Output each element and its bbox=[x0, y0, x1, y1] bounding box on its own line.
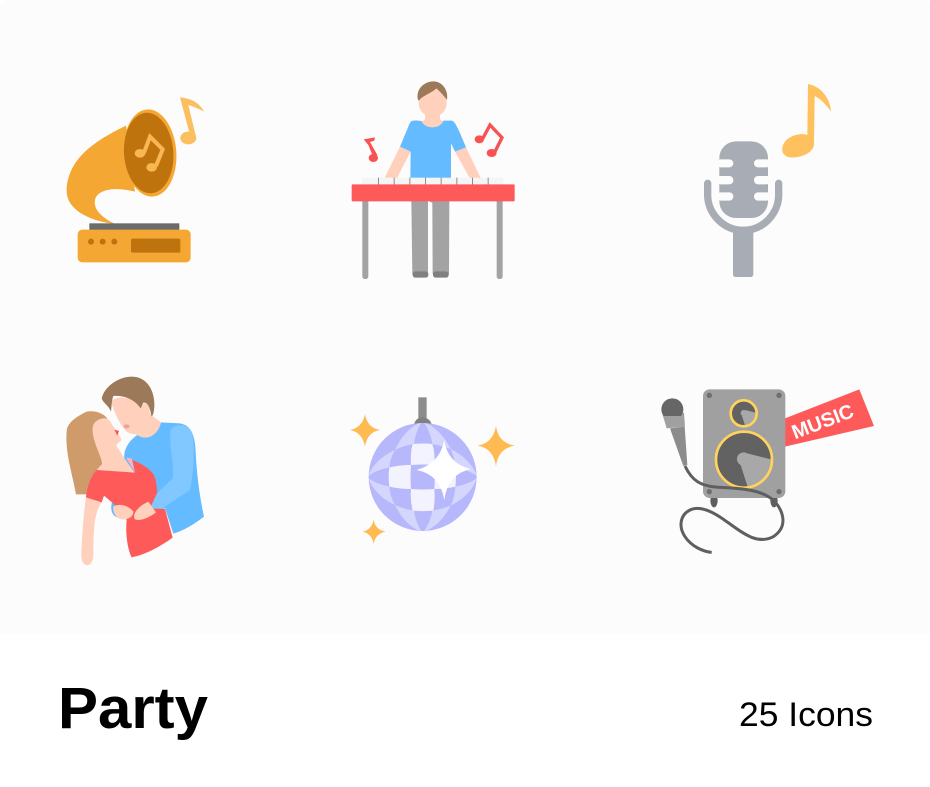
icon count: 25 Icons bbox=[739, 696, 873, 734]
music tag: MUSIC bbox=[789, 400, 857, 444]
icon: keyboard player bbox=[352, 81, 515, 279]
infographic canvas bbox=[62, 81, 874, 740]
icon: disco ball bbox=[350, 397, 515, 544]
icon: gramophone bbox=[67, 97, 204, 262]
icon: dancing couple bbox=[66, 377, 204, 565]
icon: speaker with microphone bbox=[661, 389, 874, 552]
title: Party bbox=[58, 676, 208, 741]
icon: microphone with note bbox=[708, 84, 831, 277]
music tag bbox=[785, 389, 874, 447]
